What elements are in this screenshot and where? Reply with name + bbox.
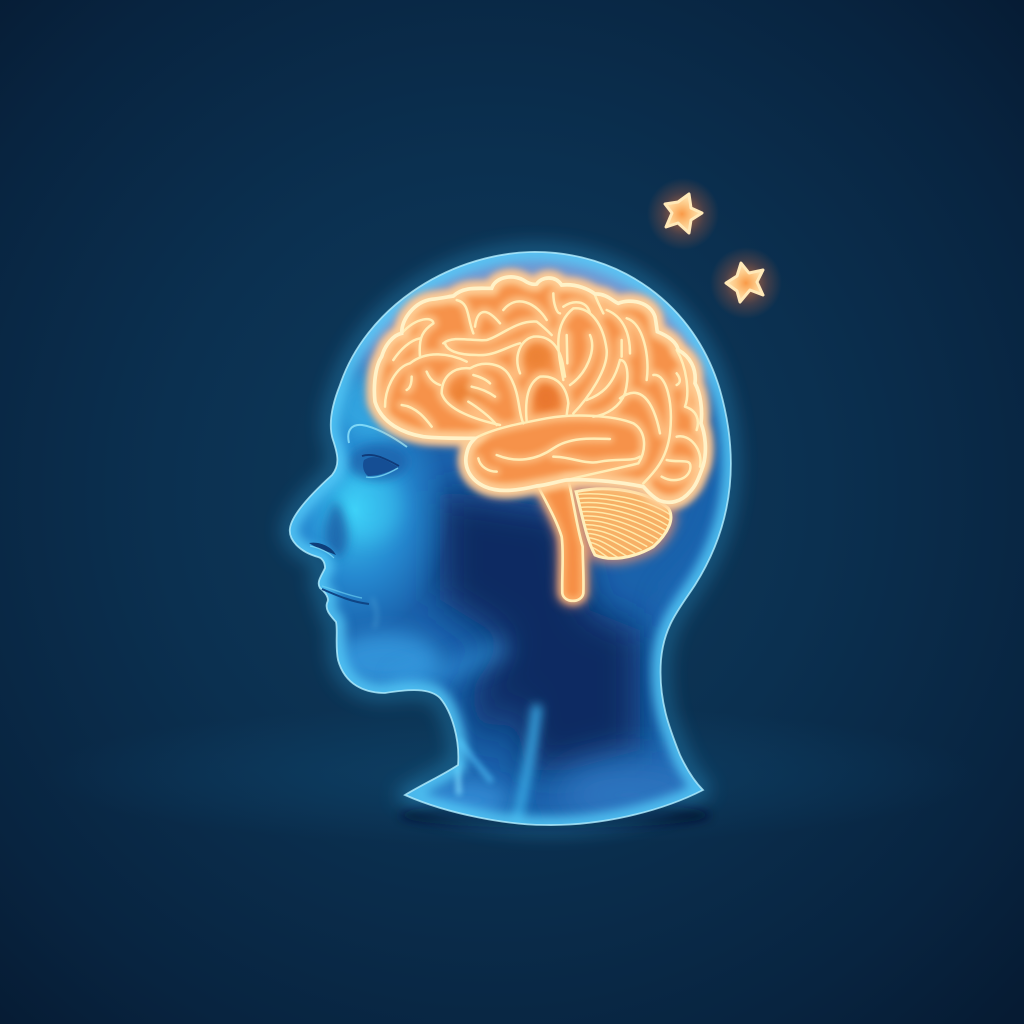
upper cheek cyan: [348, 477, 408, 542]
right side lighter: [670, 440, 755, 830]
face highlight: [294, 416, 444, 622]
neck streak left vertical: [457, 762, 459, 795]
floor shadow: [400, 802, 710, 828]
head rim line: [290, 252, 731, 825]
left lobe centre: [450, 381, 483, 406]
neck base left tone: [420, 780, 510, 820]
brow: [348, 425, 407, 447]
gyri folds: [385, 293, 701, 483]
outer soft glow: [374, 277, 705, 502]
forehead cyan: [334, 366, 398, 444]
upper lobe centre: [523, 343, 551, 370]
temporal soft glow: [478, 439, 640, 472]
eye: [363, 457, 398, 476]
fold soft glow: [385, 293, 701, 483]
eye socket shadow: [348, 444, 408, 480]
cerebrum: [374, 277, 705, 502]
neck streak centre: [516, 705, 537, 823]
mouth: [322, 589, 369, 604]
lower lid highlight: [366, 468, 398, 477]
deep orange lobe centre: [532, 382, 560, 414]
inner rim light: [290, 252, 731, 825]
neck base right tone: [555, 763, 705, 827]
floor glow: [42, 705, 982, 845]
star lower: [710, 247, 782, 319]
head glow halo: [290, 252, 731, 825]
head base fill: [294, 348, 730, 824]
eyelid line: [362, 455, 399, 466]
chin light: [330, 632, 440, 688]
upper lip highlight: [322, 586, 362, 598]
star upper: [647, 178, 719, 250]
cerebellum: [576, 489, 671, 558]
brain glow: [374, 277, 705, 601]
nostril highlight: [310, 546, 334, 558]
cerebellum stripes: [577, 494, 671, 558]
face details: [309, 425, 407, 628]
jaw highlight: [395, 645, 505, 682]
nostril: [309, 543, 336, 555]
smile crease: [372, 598, 377, 628]
brain outline: [374, 277, 705, 502]
dark region across cheek and neck: [440, 490, 640, 770]
neck streak left diagonal: [458, 740, 492, 782]
temporal folds: [478, 439, 640, 472]
cranium tone: [352, 253, 716, 402]
brain stem: [538, 480, 584, 601]
brain: [374, 277, 705, 601]
nose shade: [325, 500, 347, 558]
head silhouette: [290, 252, 731, 825]
